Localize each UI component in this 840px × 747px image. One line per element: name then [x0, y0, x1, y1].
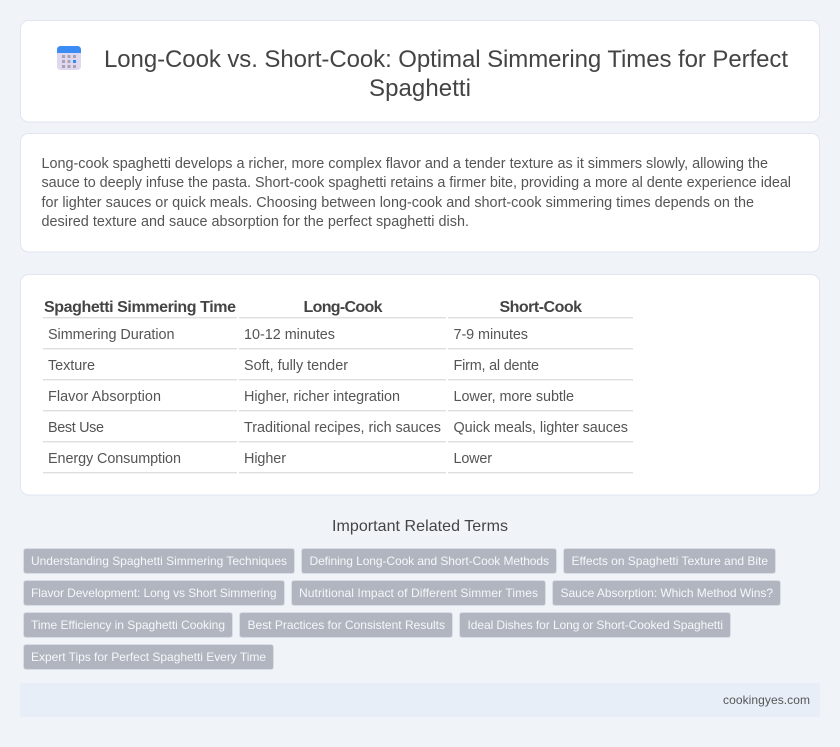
title: Spaghetti	[369, 75, 471, 102]
panel: comparison table	[20, 274, 820, 495]
table header row: Long-Cook	[304, 299, 383, 316]
title: Long-Cook vs. Short-Cook: Optimal Simmering Times for Perfect	[104, 46, 788, 73]
row: simmering duration: 7-9 minutes	[454, 327, 528, 343]
text block: introduction: desired texture and sauce absorption for the perfect spaghetti dish.	[42, 214, 469, 230]
row: energy consumption: Energy Consumption	[48, 451, 181, 467]
row: flavor absorption	[48, 389, 574, 405]
row: energy consumption	[48, 451, 492, 467]
tag	[24, 548, 294, 574]
row: simmering duration: Simmering Duration	[48, 327, 174, 343]
table header row: Spaghetti Simmering Time	[44, 299, 236, 316]
tag: Best Practices for Consistent Results	[248, 618, 445, 632]
text block: introduction: for lighter sauces or quick meals. Choosing between long-cook and short-cook simmering times depends on the	[42, 195, 754, 211]
row: best use: Best Use	[48, 420, 104, 436]
tag: Sauce Absorption: Which Method Wins?	[560, 586, 773, 600]
tag	[24, 580, 284, 606]
related terms tags	[24, 548, 780, 670]
tag	[240, 612, 452, 638]
row: flavor absorption: Flavor Absorption	[48, 389, 161, 405]
row: energy consumption: Higher	[244, 451, 286, 467]
tag	[552, 580, 780, 606]
tag: Defining Long-Cook and Short-Cook Methods	[310, 554, 549, 568]
row: flavor absorption: Higher, richer integration	[244, 389, 400, 405]
tag: Understanding Spaghetti Simmering Techniques	[31, 554, 287, 568]
panel: header	[20, 20, 820, 122]
tag: Flavor Development: Long vs Short Simmering	[31, 586, 276, 600]
text block: introduction	[42, 156, 791, 230]
row: best use	[48, 420, 628, 436]
table row lines	[43, 317, 633, 473]
footer: cookingyes.com	[723, 693, 810, 707]
row: texture: Texture	[48, 358, 95, 374]
tag: Ideal Dishes for Long or Short-Cooked Spaghetti	[468, 618, 723, 632]
text block: introduction: sauce to deeply infuse the pasta. Short-cook spaghetti retains a firmer bite, providing a more al dente experience ideal	[42, 175, 791, 191]
tag: Effects on Spaghetti Texture and Bite	[572, 554, 768, 568]
footer	[20, 683, 820, 717]
tag	[564, 548, 776, 574]
row: simmering duration	[48, 327, 528, 343]
row: flavor absorption: Lower, more subtle	[454, 389, 574, 405]
row: texture	[48, 358, 539, 374]
row: best use: Quick meals, lighter sauces	[454, 420, 628, 436]
tag: Nutritional Impact of Different Simmer Times	[299, 586, 538, 600]
tag	[302, 548, 556, 574]
tag: Time Efficiency in Spaghetti Cooking	[31, 618, 225, 632]
tag	[460, 612, 730, 638]
tag	[24, 644, 274, 670]
text block: introduction: Long-cook spaghetti develops a richer, more complex flavor and a tender texture as it simmers slowly, allowing the	[42, 156, 768, 172]
heading: important related terms: Important Related Terms	[332, 518, 508, 535]
panel: introduction	[20, 134, 820, 252]
title	[104, 46, 788, 102]
tag	[24, 612, 232, 638]
row: energy consumption: Lower	[454, 451, 492, 467]
row: texture: Soft, fully tender	[244, 358, 348, 374]
tag: Expert Tips for Perfect Spaghetti Every Time	[31, 650, 266, 664]
tag	[292, 580, 546, 606]
row: simmering duration: 10-12 minutes	[244, 327, 335, 343]
icon: calendar	[57, 46, 81, 70]
table header row	[44, 299, 582, 316]
row: texture: Firm, al dente	[454, 358, 539, 374]
table header row: Short-Cook	[500, 299, 582, 316]
row: best use: Traditional recipes, rich sauces	[244, 420, 441, 436]
